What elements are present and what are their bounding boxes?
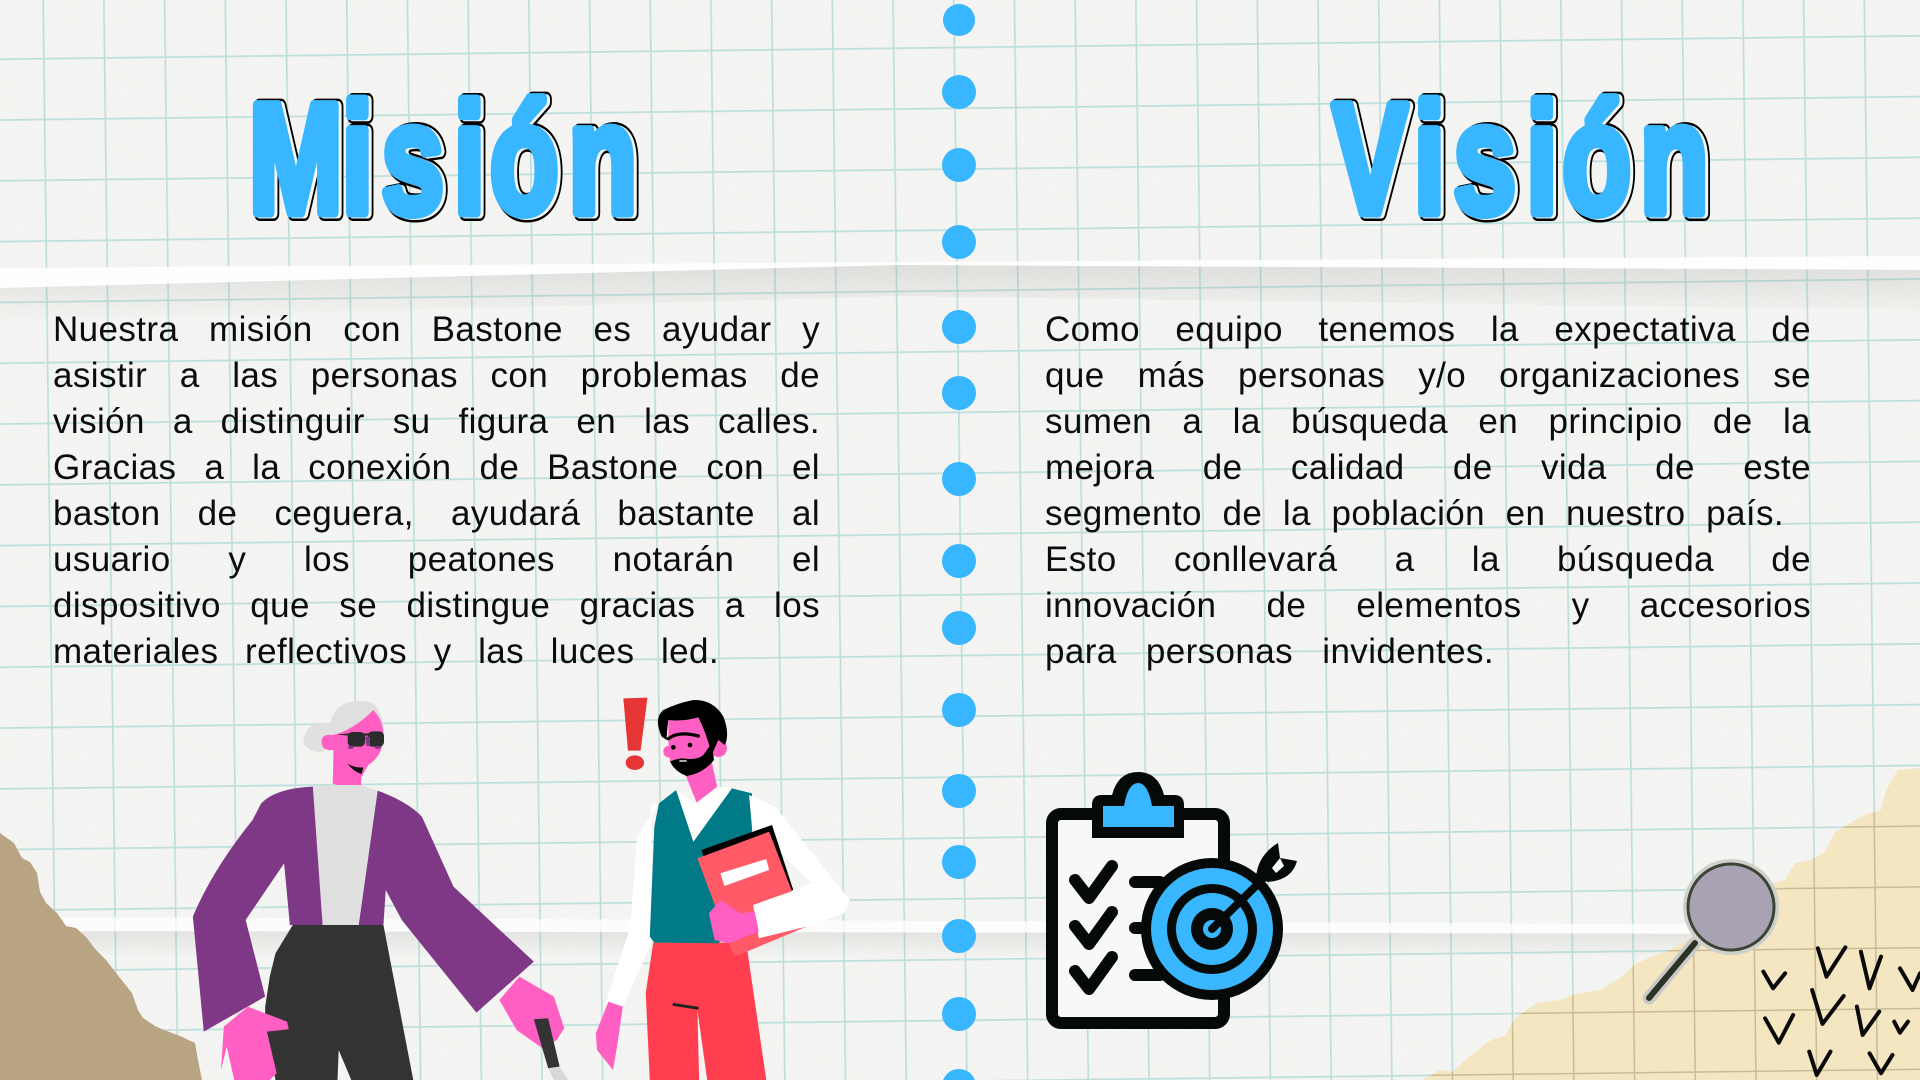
woman head	[303, 701, 384, 788]
text block: misión: usuario y los peatones notarán el	[53, 540, 820, 579]
text block: misión: Gracias a la conexión de Bastone con el	[53, 448, 820, 487]
man head	[658, 700, 727, 803]
text block: misión	[53, 310, 820, 671]
title: Visión: Visión	[1336, 72, 1712, 247]
illustration: woman with white cane	[193, 701, 568, 1080]
centre dotted line	[942, 4, 976, 1080]
text block: visión: innovación de elementos y accesorios	[1045, 586, 1811, 625]
title: Misión: Misión	[252, 72, 640, 247]
text block: misión: visión a distinguir su figura en las calles.	[53, 402, 820, 441]
text block: visión	[1045, 310, 1811, 671]
illustration: man with notebook	[596, 698, 850, 1080]
icon: clipboard with target	[1052, 772, 1297, 1023]
icon: magnifying glass	[1649, 859, 1779, 998]
target	[1141, 843, 1297, 1000]
text block: visión: para personas invidentes.	[1045, 632, 1494, 671]
text block: misión: materiales reflectivos y las luces led.	[53, 632, 719, 671]
text block: visión: Esto conllevará a la búsqueda de	[1045, 540, 1811, 579]
text block: visión: mejora de calidad de vida de este	[1045, 448, 1811, 487]
title: Visión: Visión	[1336, 72, 1712, 247]
clipboard clip	[1092, 772, 1184, 838]
text block: visión: sumen a la búsqueda en principio de la	[1045, 402, 1811, 441]
torn yellow graph paper, bottom right	[1400, 760, 1920, 1080]
text block: misión: asistir a las personas con problemas de	[53, 356, 820, 395]
text block: visión: que más personas y/o organizaciones se	[1045, 356, 1811, 395]
decorative check marks	[1763, 947, 1920, 1075]
title: Misión: Misión	[249, 71, 637, 246]
text block: misión: baston de ceguera, ayudará bastante al	[53, 494, 820, 533]
text block: visión: segmento de la población en nuestro país.	[1045, 494, 1784, 533]
text block: misión: Nuestra misión con Bastone es ayudar y	[53, 310, 820, 349]
torn kraft paper, bottom left	[0, 820, 210, 1080]
title: Visión: Visión	[1333, 71, 1709, 246]
checklist marks	[1075, 866, 1160, 989]
exclamation mark	[623, 698, 647, 770]
text block: visión: Como equipo tenemos la expectativa de	[1045, 310, 1811, 349]
text block: misión: dispositivo que se distingue gracias a los	[53, 586, 820, 625]
title: Misión: Misión	[252, 72, 640, 247]
